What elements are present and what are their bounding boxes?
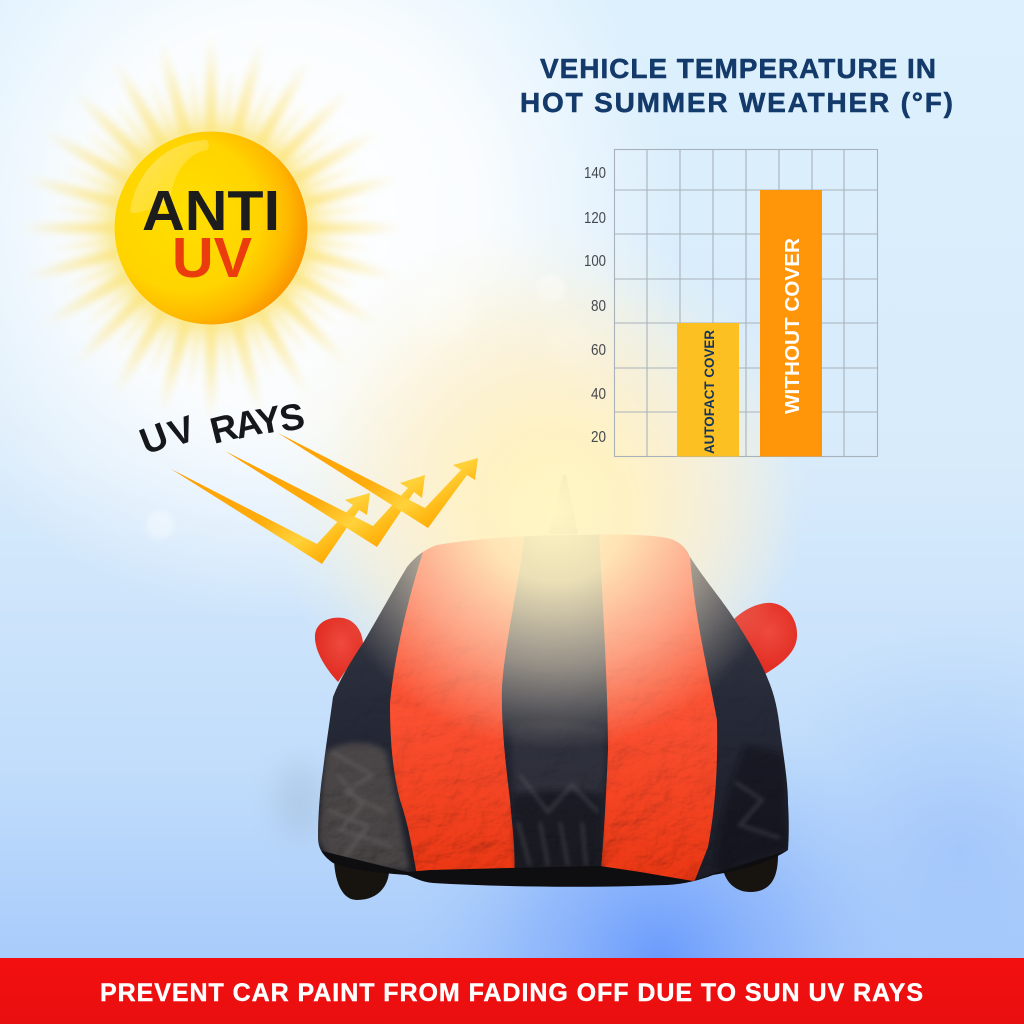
ground shadow xyxy=(276,760,324,840)
mirrors xyxy=(315,603,797,682)
anti uv label xyxy=(142,179,280,290)
y-axis labels: 100 xyxy=(584,253,606,270)
bar: autofact cover xyxy=(677,323,739,456)
y-axis labels: 40 xyxy=(591,386,606,403)
right red stripe xyxy=(599,530,717,885)
bar: autofact cover: AUTOFACT COVER xyxy=(702,330,717,454)
footer banner xyxy=(0,958,1024,1024)
footer banner: PREVENT CAR PAINT FROM FADING OFF DUE TO SUN UV RAYS xyxy=(100,979,923,1007)
anti uv label: UV xyxy=(172,226,252,290)
y-axis labels: 60 xyxy=(591,342,606,359)
bar: without cover xyxy=(760,190,822,456)
fabric wrinkles xyxy=(328,624,717,881)
wheels xyxy=(334,855,778,900)
y-axis labels: 20 xyxy=(591,429,606,446)
bar: without cover: WITHOUT COVER xyxy=(782,237,804,414)
arrow: uv ray 3 xyxy=(278,433,478,528)
y-axis labels: 120 xyxy=(584,210,606,227)
sun haze over roof xyxy=(315,270,795,750)
elastic hem xyxy=(322,851,786,887)
heading: chart title: VEHICLE TEMPERATURE IN xyxy=(540,53,936,84)
bar chart: vehicle temperature xyxy=(584,149,878,457)
left red stripe xyxy=(390,530,525,880)
y-axis labels: 80 xyxy=(591,298,606,315)
cover body xyxy=(318,534,789,887)
y-axis labels xyxy=(584,165,606,446)
dark panel shading xyxy=(318,743,410,870)
soft crease shading xyxy=(328,752,780,866)
icon: sun rays xyxy=(13,30,409,426)
arrow: uv ray 2 xyxy=(225,451,425,547)
photo: covered car xyxy=(276,326,798,900)
arrow: uv ray 1 xyxy=(171,469,370,564)
antenna xyxy=(549,475,578,534)
heading: chart title xyxy=(520,53,953,118)
heading: chart title: HOT SUMMER WEATHER (°F) xyxy=(520,87,953,118)
y-axis labels: 140 xyxy=(584,165,606,182)
label: uv rays: UV RAYS xyxy=(134,395,308,462)
anti uv label: ANTI xyxy=(142,179,280,243)
icon: sun badge xyxy=(114,132,308,324)
